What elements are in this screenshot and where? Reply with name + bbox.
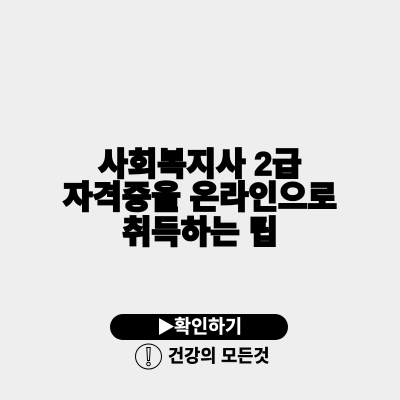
brand label: 건강의 모든것 bbox=[168, 346, 269, 366]
title: 사회복지사 2급 bbox=[98, 146, 302, 182]
icon: exclamation circle bbox=[135, 344, 162, 370]
title bbox=[62, 146, 337, 250]
button: confirm bbox=[110, 314, 288, 340]
title: 취득하는 팁 bbox=[122, 214, 278, 250]
button: confirm: 확인하기 bbox=[174, 316, 242, 337]
title: 자격증을 온라인으로 bbox=[63, 179, 337, 215]
